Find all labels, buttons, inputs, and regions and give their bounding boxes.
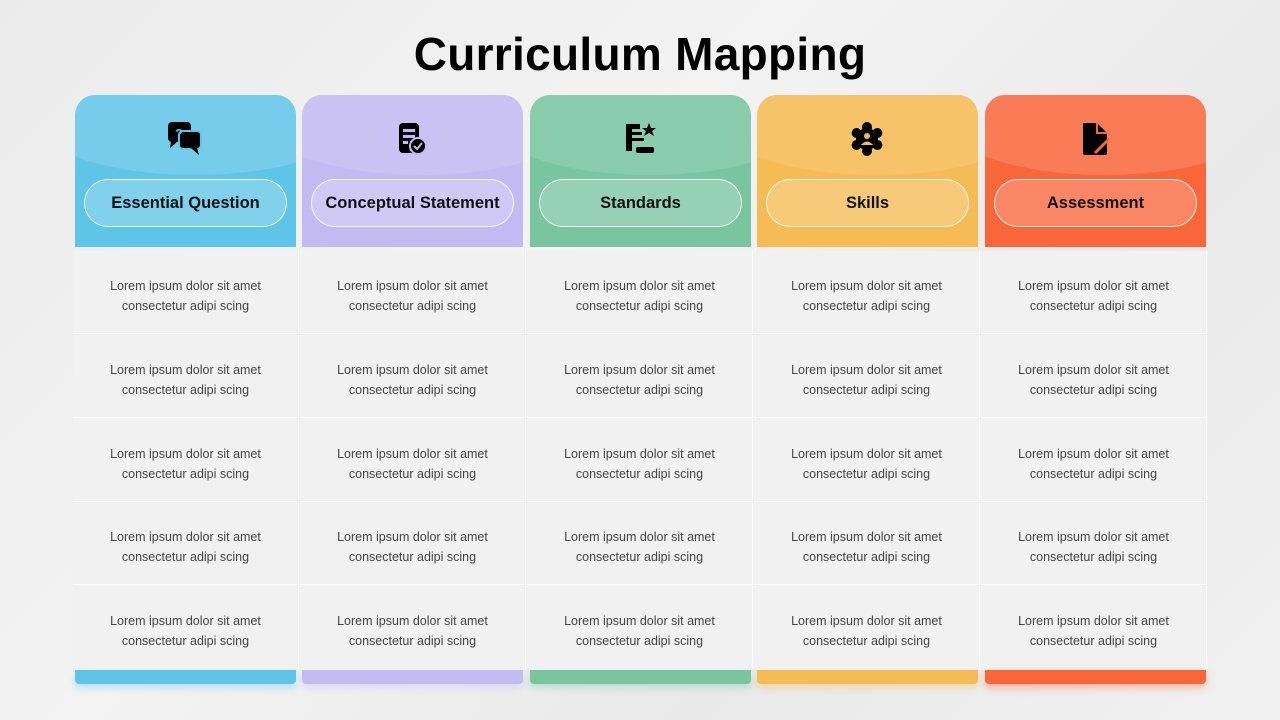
- table grid: Lorem ipsum dolor sit amet: [564, 362, 715, 376]
- label: Conceptual Statement: Conceptual Statement: [325, 194, 500, 212]
- footer bar: green: [530, 670, 751, 684]
- header: skills: [757, 95, 978, 247]
- table grid: Lorem ipsum dolor sit amet: [110, 614, 261, 628]
- header: assessment: [985, 95, 1206, 247]
- table grid: consectetur adipi scing: [576, 550, 703, 564]
- table grid: Lorem ipsum dolor sit amet: [791, 446, 942, 460]
- table grid: consectetur adipi scing: [349, 382, 476, 396]
- label: Assessment: [994, 179, 1197, 227]
- table grid: consectetur adipi scing: [122, 550, 249, 564]
- table grid: Lorem ipsum dolor sit amet: [110, 278, 261, 292]
- table grid: Lorem ipsum dolor sit amet: [564, 278, 715, 292]
- label: Standards: Standards: [600, 194, 681, 212]
- table grid: consectetur adipi scing: [803, 298, 930, 312]
- icon: question chat: [168, 122, 202, 155]
- table grid: consectetur adipi scing: [349, 466, 476, 480]
- label: Skills: [766, 179, 969, 227]
- table grid: consectetur adipi scing: [1030, 298, 1157, 312]
- header: standards: [530, 95, 751, 247]
- table grid: Lorem ipsum dolor sit amet: [337, 278, 488, 292]
- footer bar: red: [985, 670, 1206, 684]
- table grid: consectetur adipi scing: [576, 382, 703, 396]
- table grid: Lorem ipsum dolor sit amet: [1018, 614, 1169, 628]
- table grid: consectetur adipi scing: [349, 298, 476, 312]
- table grid: [73, 251, 1208, 670]
- table grid: Lorem ipsum dolor sit amet: [337, 530, 488, 544]
- label: Assessment: Assessment: [1047, 194, 1144, 212]
- table grid: consectetur adipi scing: [349, 550, 476, 564]
- table grid: consectetur adipi scing: [803, 466, 930, 480]
- table grid: consectetur adipi scing: [576, 634, 703, 648]
- table grid: consectetur adipi scing: [803, 550, 930, 564]
- table grid: consectetur adipi scing: [576, 298, 703, 312]
- footer bar: purple: [302, 670, 523, 684]
- label: Standards: [539, 179, 742, 227]
- table grid: Lorem ipsum dolor sit amet: [110, 362, 261, 376]
- table grid: Lorem ipsum dolor sit amet: [1018, 278, 1169, 292]
- label: Essential Question: Essential Question: [111, 194, 260, 212]
- table grid: Lorem ipsum dolor sit amet: [337, 614, 488, 628]
- table grid: consectetur adipi scing: [122, 382, 249, 396]
- table grid: consectetur adipi scing: [349, 634, 476, 648]
- label: Skills: Skills: [846, 194, 889, 212]
- label: Essential Question: [84, 179, 287, 227]
- table grid: consectetur adipi scing: [1030, 466, 1157, 480]
- icon: document edit: [1083, 123, 1110, 155]
- table grid: consectetur adipi scing: [1030, 382, 1157, 396]
- table grid: Lorem ipsum dolor sit amet: [791, 362, 942, 376]
- table grid: consectetur adipi scing: [1030, 550, 1157, 564]
- table grid: consectetur adipi scing: [122, 634, 249, 648]
- table grid: Lorem ipsum dolor sit amet: [564, 530, 715, 544]
- table grid: consectetur adipi scing: [803, 382, 930, 396]
- table grid: Lorem ipsum dolor sit amet: [791, 530, 942, 544]
- table grid: consectetur adipi scing: [803, 634, 930, 648]
- title: Curriculum Mapping: [414, 28, 866, 80]
- icon: gear person: [852, 122, 882, 156]
- icon: document check: [399, 123, 425, 153]
- table grid: Lorem ipsum dolor sit amet: [564, 614, 715, 628]
- table grid: Lorem ipsum dolor sit amet: [110, 530, 261, 544]
- table grid: Lorem ipsum dolor sit amet: [110, 446, 261, 460]
- table grid: Lorem ipsum dolor sit amet: [337, 446, 488, 460]
- table grid: Lorem ipsum dolor sit amet: [791, 278, 942, 292]
- footer bar: yellow: [757, 670, 978, 684]
- header: essential question: [75, 95, 296, 247]
- table grid: consectetur adipi scing: [122, 466, 249, 480]
- table grid: consectetur adipi scing: [576, 466, 703, 480]
- table grid: Lorem ipsum dolor sit amet: [1018, 446, 1169, 460]
- table grid: Lorem ipsum dolor sit amet: [1018, 362, 1169, 376]
- icon: star list: [626, 123, 656, 153]
- label: Conceptual Statement: [311, 179, 514, 227]
- table grid: Lorem ipsum dolor sit amet: [791, 614, 942, 628]
- footer bar: blue: [75, 670, 296, 684]
- icon: question chat: ?: [175, 126, 183, 141]
- table grid: consectetur adipi scing: [122, 298, 249, 312]
- table grid: Lorem ipsum dolor sit amet: [1018, 530, 1169, 544]
- header: conceptual statement: [302, 95, 523, 247]
- table grid: Lorem ipsum dolor sit amet: [337, 362, 488, 376]
- table grid: consectetur adipi scing: [1030, 634, 1157, 648]
- table grid: Lorem ipsum dolor sit amet: [564, 446, 715, 460]
